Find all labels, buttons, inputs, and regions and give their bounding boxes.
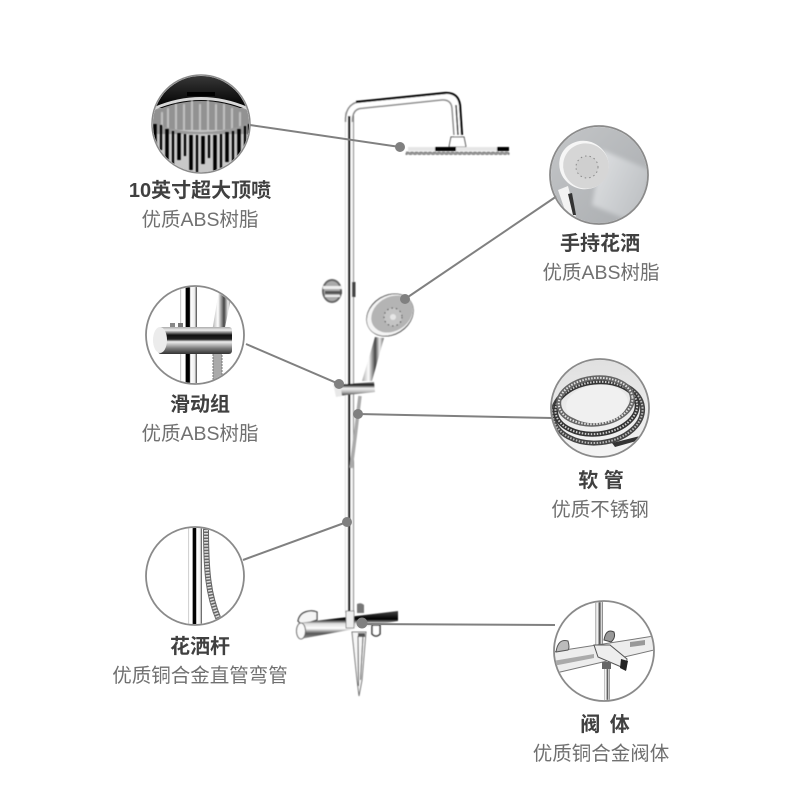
title: hose: 软 管	[578, 469, 624, 492]
icon: hand shower detail	[550, 126, 650, 225]
text: valve material: 优质铜合金阀体	[533, 743, 669, 765]
leader line: hand shower	[400, 196, 557, 304]
icon: rail detail	[146, 525, 244, 627]
title: valve: 阀 体	[580, 713, 632, 736]
slider	[333, 381, 375, 397]
wall mount	[322, 279, 342, 303]
leader line: slider	[246, 344, 344, 389]
hand shower	[358, 285, 422, 381]
text: hose material: 优质不锈钢	[551, 499, 649, 521]
text: hand shower material: 优质ABS树脂	[542, 262, 660, 284]
icon: slider detail	[146, 284, 244, 386]
rail	[345, 112, 354, 613]
leader line: hose	[353, 409, 552, 419]
text: top shower material: 优质ABS树脂	[141, 209, 259, 231]
title: rail: 花洒杆	[170, 635, 230, 658]
shower head top	[406, 137, 509, 154]
leader line: top shower	[250, 125, 405, 152]
icon: rain shower detail	[150, 74, 252, 176]
leader line: valve	[356, 618, 555, 628]
text: rail material: 优质铜合金直管弯管	[112, 665, 288, 687]
rail clip	[352, 282, 356, 297]
leader line: rail	[243, 517, 352, 560]
title: top shower: 10英寸超大顶喷	[129, 179, 271, 202]
title: hand shower: 手持花洒	[560, 232, 640, 255]
icon: hose detail	[549, 359, 649, 457]
icon: valve detail	[552, 601, 654, 703]
overhead arm	[345, 93, 462, 136]
text: slider material: 优质ABS树脂	[141, 423, 259, 445]
thermostatic valve	[296, 603, 398, 696]
title: slider: 滑动组	[170, 393, 230, 416]
shower system product	[296, 93, 509, 696]
hose	[351, 396, 360, 468]
